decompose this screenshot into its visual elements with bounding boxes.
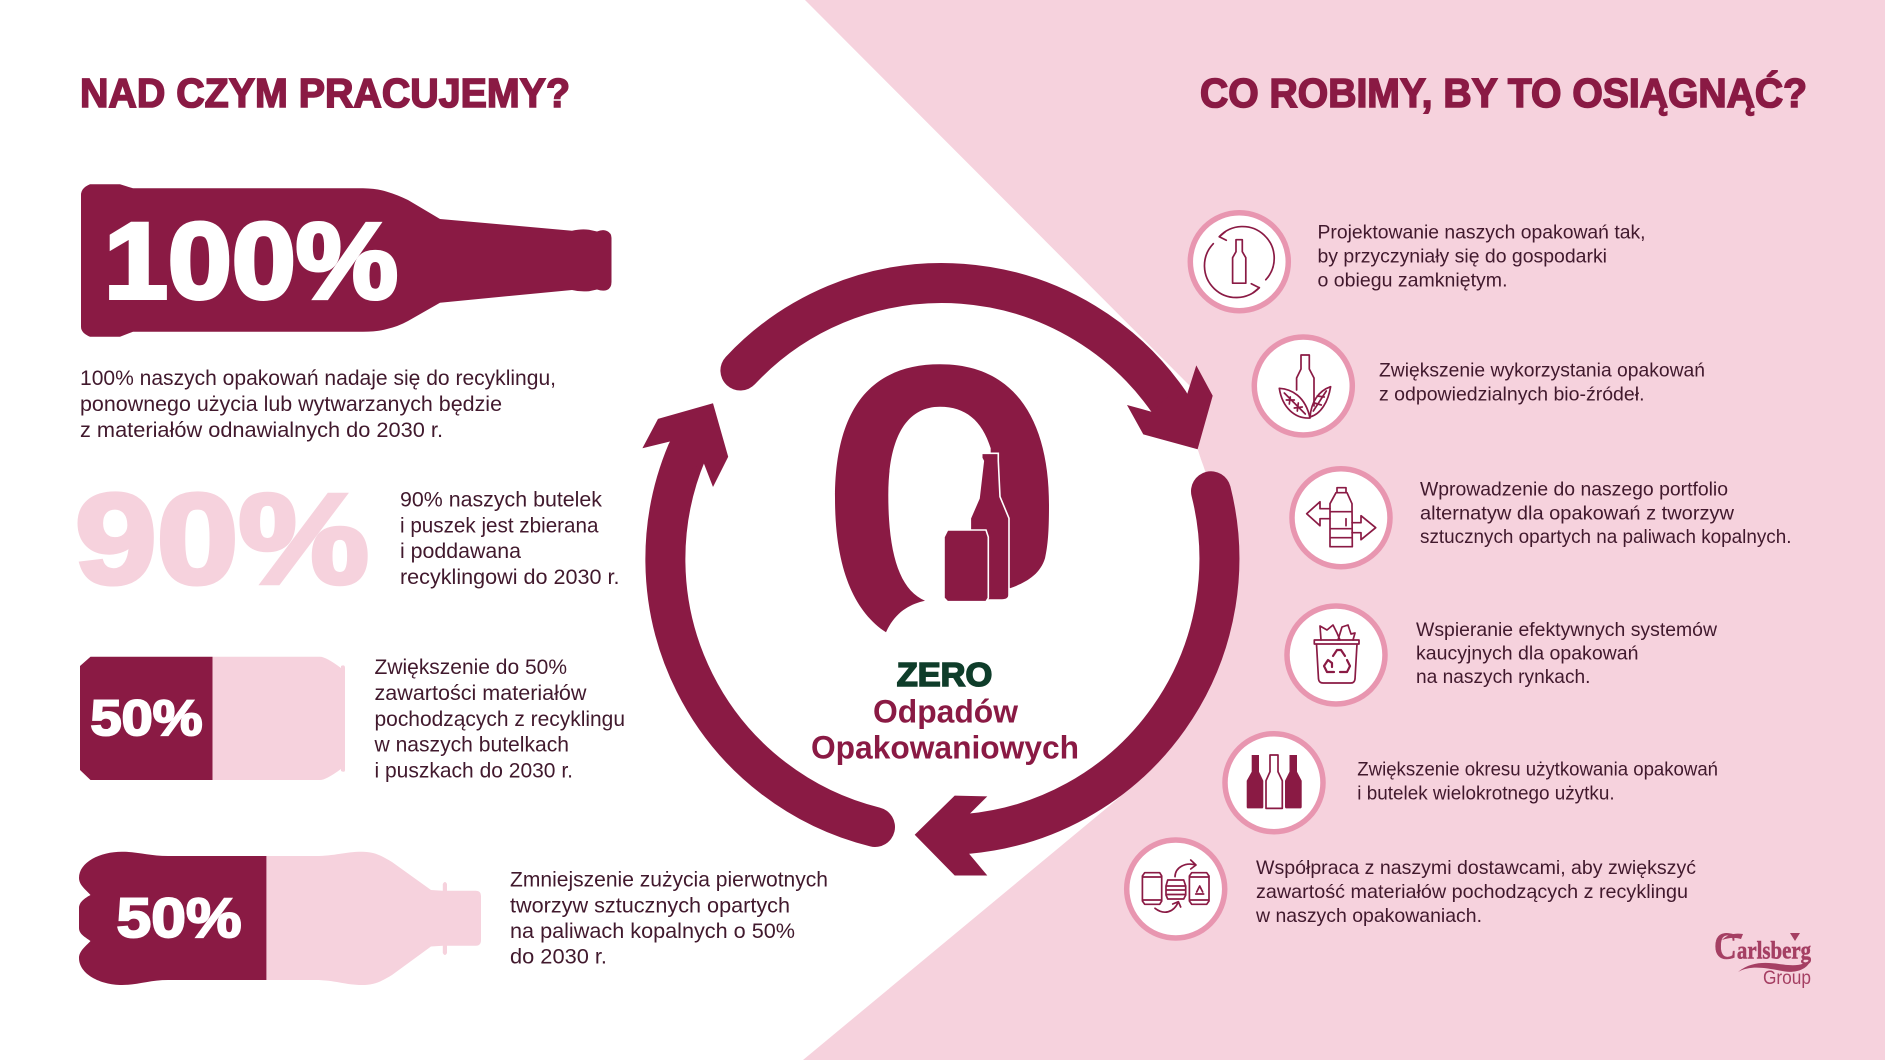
icon: three bottles (1225, 734, 1323, 832)
text: 90% description: i poddawana (400, 540, 521, 563)
icon: can (944, 530, 988, 602)
text: action 6: zawartość materiałów pochodzących z recyklingu (1256, 881, 1688, 903)
text: 50% recycled description: i puszkach do 2030 r. (374, 759, 573, 782)
text: 90% description (400, 488, 620, 589)
target: 50% less virgin plastic (79, 852, 828, 985)
text: action 3: Wprowadzenie do naszego portfolio (1420, 478, 1728, 500)
text: 100% description: z materiałów odnawialnych do 2030 r. (80, 419, 443, 442)
central title (811, 656, 1079, 766)
icon: can, pink part (212, 657, 345, 780)
text: action 4: Wspieranie efektywnych systemów (1416, 619, 1718, 641)
C top flourish (1722, 934, 1743, 940)
text: action 1 (1318, 222, 1646, 292)
text: action 5: i butelek wielokrotnego użytku. (1357, 782, 1615, 804)
text: action 5: Zwiększenie okresu użytkowania opakowań (1357, 758, 1718, 780)
text: action 2: Zwiększenie wykorzystania opakowań (1379, 360, 1705, 382)
text: 50% recycled description: w naszych butelkach (373, 734, 569, 757)
text: 50% recycled description (373, 656, 625, 782)
action 3: fossil plastic alternatives (1292, 469, 1792, 567)
arrow: left arc (642, 403, 875, 827)
icon: beer bottle 100% (81, 184, 612, 337)
text: action 2: z odpowiedzialnych bio-źródeł. (1379, 384, 1644, 406)
action 4: deposit systems (1287, 606, 1718, 704)
heading: left: NAD CZYM PRACUJEMY? (80, 70, 570, 116)
icon: bottle (970, 453, 1009, 600)
icon: cans recycling chain (1127, 840, 1225, 938)
icon: recycling bin (1287, 606, 1385, 704)
icon: PET bottle, dark part (79, 852, 266, 985)
number: 50% can: 50% (90, 690, 202, 746)
text: 50% recycled description: zawartości materiałów (374, 682, 587, 705)
text: action 1: by przyczyniały się do gospodarki (1318, 246, 1607, 268)
action 5: refillable bottles (1225, 734, 1718, 832)
icon: letter O (835, 364, 1049, 632)
text: 50% recycled description: pochodzących z recyklingu (374, 708, 625, 731)
number: 100%: 100% (104, 200, 398, 321)
text: plastic description: na paliwach kopalnych o 50% (510, 920, 795, 943)
target: 90% collected (75, 468, 620, 611)
text: 90% description: recyklingowi do 2030 r. (400, 566, 620, 589)
text: action 4: kaucyjnych dla opakowań (1416, 642, 1638, 664)
text: 90% description: i puszek jest zbierana (400, 514, 599, 538)
text: 90% description: 90% naszych butelek (400, 488, 602, 512)
pink background panel (803, 0, 1885, 1060)
text: action 4: na naszych rynkach. (1416, 666, 1590, 688)
text: action 3: sztucznych opartych na paliwach kopalnych. (1420, 526, 1792, 548)
text: action 4 (1416, 619, 1718, 688)
icon: can, dark part (80, 657, 212, 780)
text: action 5 (1357, 758, 1718, 804)
number: 50% PET: 50% (116, 886, 242, 949)
icon: PET bottle, pink part (266, 852, 481, 985)
logo: Carlsberg Group (1714, 926, 1811, 989)
text: action 3 (1420, 478, 1792, 548)
wordmark: Carlsberg (1714, 926, 1811, 968)
text: action 6: w naszych opakowaniach. (1255, 905, 1482, 927)
text: plastic description: Zmniejszenie zużycia pierwotnych (510, 869, 828, 892)
icon: bottle with leaves (1254, 337, 1352, 435)
text: action 6: Współpraca z naszymi dostawcami, aby zwiększyć (1256, 857, 1696, 879)
action 1: circular design (1190, 213, 1646, 311)
text: action 3: alternatyw dla opakowań z tworzyw (1420, 502, 1735, 524)
title: Opakowaniowych: Opakowaniowych (811, 730, 1079, 766)
text: 50% recycled description: Zwiększenie do 50% (374, 656, 567, 679)
subtitle: Group: Group (1763, 968, 1811, 989)
number: 90%: 90% (75, 468, 369, 611)
title: ZERO: ZERO (897, 656, 992, 693)
white disc inside ring (666, 282, 1220, 836)
action 6: supplier cooperation (1127, 840, 1696, 938)
text: 100% description (80, 367, 556, 442)
icon: plastic bottle with arrows (1292, 469, 1390, 567)
circular arrows (642, 283, 1219, 876)
text: 100% description: ponownego użycia lub wytwarzanych będzie (80, 393, 502, 416)
text: plastic description: do 2030 r. (510, 946, 607, 968)
text: action 6 (1255, 857, 1696, 927)
central logo: zero with bottle and can (835, 364, 1049, 632)
text: action 1: Projektowanie naszych opakowań tak, (1318, 222, 1646, 244)
swoosh (1738, 959, 1811, 972)
text: plastic description: tworzyw sztucznych opartych (510, 894, 790, 918)
arrow: right-bottom arc (915, 491, 1219, 876)
target: 50% recycled content (80, 656, 625, 782)
arrow: top arc (740, 283, 1213, 449)
text: action 1: o obiegu zamkniętym. (1318, 270, 1508, 292)
icon: bottle in circular arrows (1190, 213, 1288, 311)
heading: right: CO ROBIMY, BY TO OSIĄGNĄĆ? (1200, 70, 1807, 116)
text: plastic description (510, 869, 828, 968)
target: 100% recyclable (80, 184, 612, 442)
text: action 2 (1379, 360, 1705, 406)
action 2: bio sources (1254, 337, 1705, 435)
text: 100% description: 100% naszych opakowań nadaje się do recyklingu, (80, 367, 556, 390)
grape leaf (1790, 933, 1800, 941)
title: Odpadów: Odpadów (873, 694, 1018, 730)
